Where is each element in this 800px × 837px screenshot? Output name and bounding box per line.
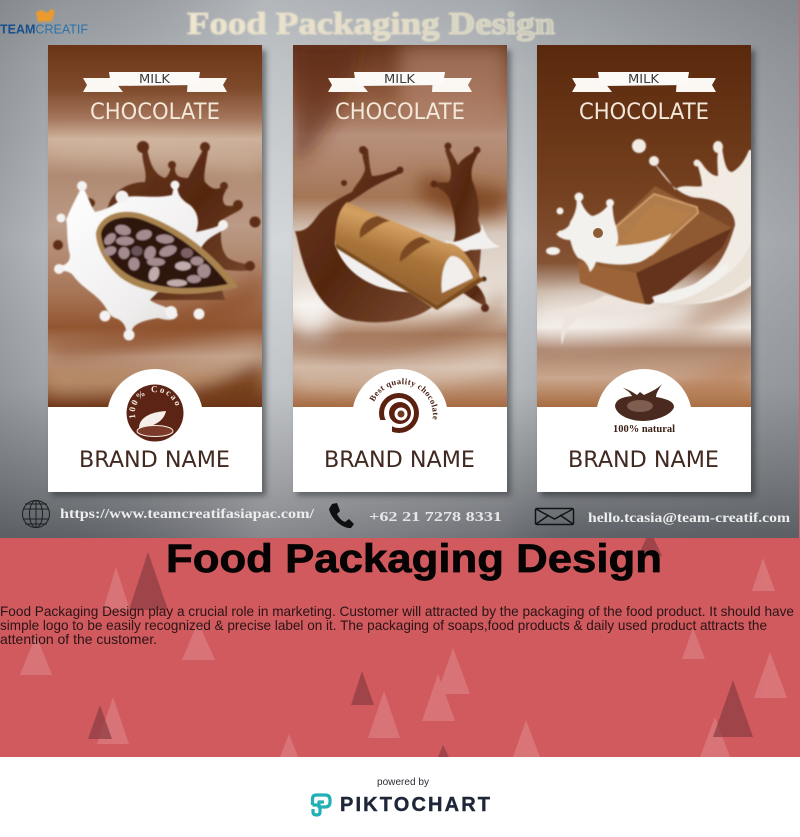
milk curl hole	[593, 228, 603, 238]
white label	[537, 407, 751, 492]
milk splash: right	[632, 139, 752, 305]
body text: Food Packaging Design play a crucial role in marketing. Customer will attracted by the packaging of the food product. It should have	[0, 603, 794, 619]
footer: powered by Piktochart	[312, 777, 490, 816]
triangle pattern	[20, 530, 787, 757]
contact bar	[22, 500, 790, 528]
body text: simple logo to be easily recognized & precise label on it. The packaging of soaps,food products & daily used product attracts the	[0, 617, 767, 633]
body text	[0, 603, 794, 647]
chocolate square	[578, 186, 732, 308]
ribbon: MILK	[572, 71, 716, 92]
icon: globe	[22, 500, 50, 528]
Piktochart wordmark: PIKTOCHART	[340, 794, 490, 816]
icon: phone	[329, 503, 354, 528]
badge: 100% natural	[613, 384, 675, 435]
milk droplets	[54, 180, 228, 340]
badge: 100% natural: 100% natural	[613, 424, 675, 435]
product name: CHOCOLATE	[335, 100, 465, 125]
badge: 100% cocoa	[126, 384, 184, 442]
panel: chocolate square package	[537, 45, 755, 496]
chocolate swirl	[295, 146, 487, 322]
phone number: +62 21 7278 8331	[369, 510, 502, 525]
brand name: BRAND NAME	[324, 448, 475, 473]
website: https://www.teamcreatifasiapac.com/	[60, 507, 315, 522]
ribbon: MILK	[83, 71, 227, 92]
chocolate droplets	[341, 142, 489, 312]
ribbon: MILK: MILK	[628, 71, 660, 86]
header photo: chocolate packaging banner	[0, 0, 800, 538]
badge: best quality chocolate spiral: Best quality chocolate	[369, 378, 438, 420]
icon: Piktochart logo	[312, 795, 330, 815]
panel: chocolate bar package	[293, 45, 514, 499]
chocolate bar	[335, 202, 484, 310]
milk under bar	[335, 224, 500, 292]
cocoa pod	[96, 212, 238, 294]
panel: description section	[0, 530, 800, 757]
swirl shading	[537, 270, 751, 407]
milk splash	[60, 186, 224, 336]
logo: Team Creatif	[0, 9, 88, 36]
product name: CHOCOLATE	[90, 100, 220, 125]
ribbon: MILK: MILK	[139, 71, 171, 86]
brand name: BRAND NAME	[568, 448, 719, 473]
chocolate splash	[53, 141, 260, 307]
badge: 100% cocoa: 100% Cocao	[129, 386, 180, 418]
body text: attention of the customer.	[0, 631, 157, 647]
panel: cocoa pod package	[48, 45, 270, 499]
logo: Team Creatif: TEAMCREATIF	[0, 22, 88, 36]
milk splash: left	[545, 192, 728, 345]
swirl shading	[288, 45, 507, 389]
banner heading: Food Packaging Design	[187, 5, 555, 41]
email: hello.tcasia@team-creatif.com	[588, 511, 790, 526]
ribbon: MILK: MILK	[384, 71, 416, 86]
product name: CHOCOLATE	[579, 100, 709, 125]
brand name: BRAND NAME	[79, 448, 230, 473]
icon: envelope	[536, 508, 574, 524]
section title: Food Packaging Design	[166, 537, 662, 581]
powered by label: powered by	[377, 777, 429, 788]
ribbon: MILK	[328, 71, 472, 92]
swirl shading	[48, 138, 262, 407]
white label	[48, 407, 262, 492]
white label	[293, 407, 507, 492]
